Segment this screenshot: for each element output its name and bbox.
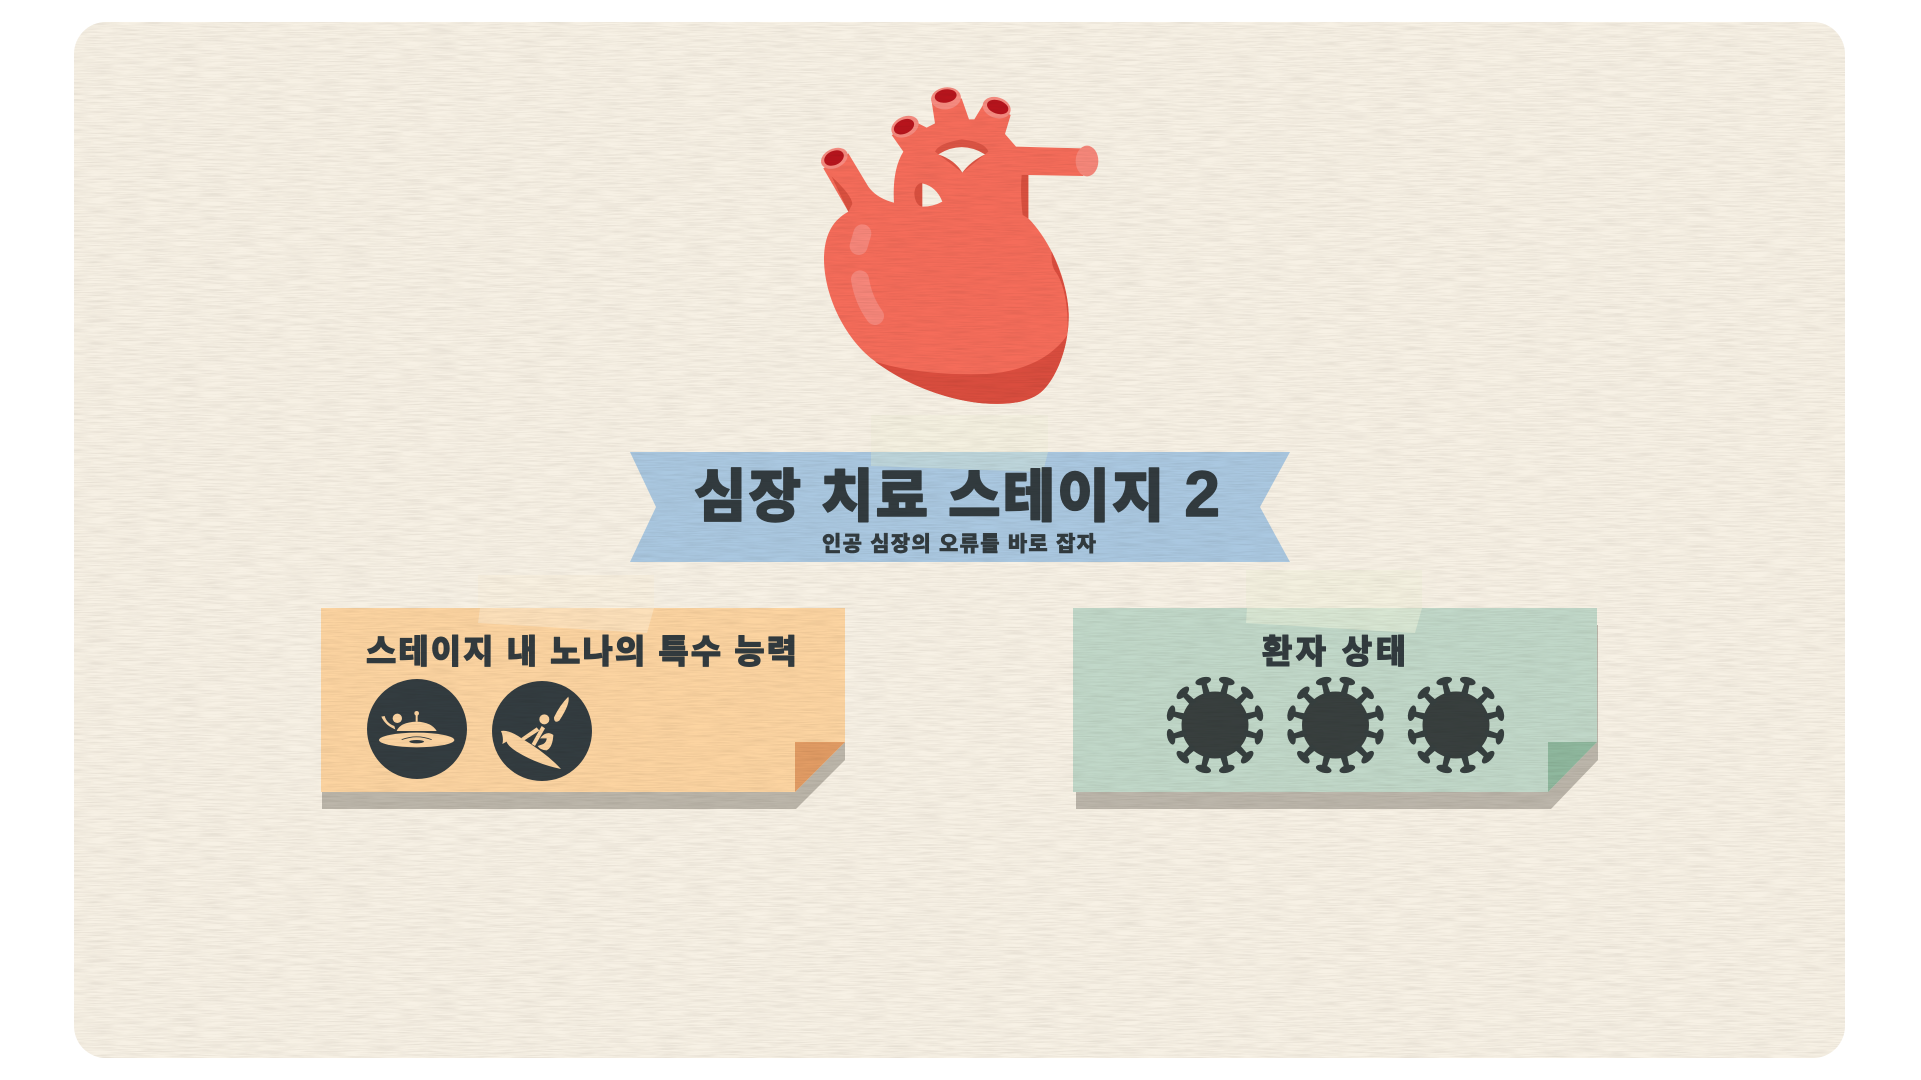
heart: vessel shadows	[832, 175, 1028, 218]
heart: vessel rims	[818, 85, 1098, 176]
icon: virus 2	[1286, 675, 1385, 775]
icon: virus 1	[1165, 675, 1265, 775]
note shadow	[1076, 625, 1598, 809]
panel: Nona's special abilities note	[321, 575, 845, 809]
panel: patient status note	[1073, 570, 1598, 809]
icon: UFO ability	[367, 679, 467, 779]
main heading: 심장 치료 스테이지 2	[694, 458, 1220, 530]
folded corner	[1548, 742, 1597, 792]
folded corner	[795, 742, 845, 792]
note tape	[1246, 570, 1422, 633]
title banner	[630, 415, 1290, 562]
heart: lower opening	[914, 183, 922, 207]
heart: arch opening	[935, 139, 988, 173]
note heading: 환자 상태	[1262, 633, 1406, 670]
subtitle: 인공 심장의 오류를 바로 잡자	[822, 533, 1096, 556]
banner tape	[871, 415, 1048, 472]
note heading: 스테이지 내 노나의 특수 능력	[366, 633, 797, 670]
heart: highlights	[859, 233, 875, 316]
illustration: anatomical heart	[818, 85, 1098, 404]
icon: virus 3	[1406, 675, 1506, 775]
note shadow	[322, 742, 845, 809]
icon: surfing ability	[492, 681, 592, 781]
note tape	[478, 575, 654, 633]
heart: bottom shadow	[875, 252, 1069, 404]
